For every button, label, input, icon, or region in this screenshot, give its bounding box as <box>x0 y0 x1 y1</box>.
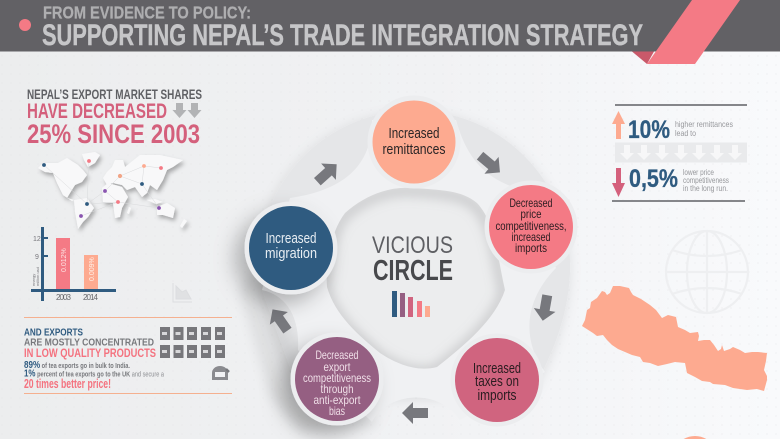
node: increased taxes on imports: Increased <box>473 360 521 377</box>
panel: low quality exports: ARE MOSTLY CONCENTRATED <box>24 336 154 348</box>
bar chart: 2014 <box>83 293 99 302</box>
ribbon <box>647 0 740 64</box>
cycle diagram <box>240 96 578 432</box>
centre label: CIRCLE <box>373 255 453 287</box>
centre label: VICIOUS <box>372 232 453 259</box>
export shares heading: NEPAL’S EXPORT MARKET SHARES <box>27 86 202 102</box>
export shares heading: 25% SINCE 2003 <box>27 119 200 149</box>
panel: remittance statistics: in the long run. <box>683 183 728 193</box>
white connecting band <box>262 120 556 422</box>
icon: shipping box <box>212 366 229 380</box>
panel: remittance statistics: lower price <box>683 167 714 177</box>
icon: up arrow <box>612 111 625 139</box>
node: decreased export competitiveness: export <box>324 360 351 374</box>
down arrow band <box>615 142 747 162</box>
node: decreased price competitiveness <box>484 180 578 274</box>
centre recess <box>326 188 505 372</box>
panel: low quality exports: 89% of tea exports go in bulk to India. <box>24 360 130 371</box>
node: decreased price competitiveness: Decreased <box>510 196 552 210</box>
node: decreased export competitiveness <box>290 332 384 426</box>
bar chart: 2003 <box>56 293 72 302</box>
icon: faint chart <box>173 283 192 302</box>
node: increased migration: migration <box>265 245 317 262</box>
node: decreased export competitiveness: anti-export <box>314 393 361 407</box>
panel: remittance statistics: 0,5% <box>629 165 678 193</box>
arrow: migration to remittances <box>310 156 344 190</box>
bar chart: 0.009% <box>89 257 96 281</box>
world map <box>38 152 187 229</box>
icon: globe <box>666 231 748 313</box>
map of Nepal <box>582 286 767 391</box>
node: decreased price competitiveness: increased <box>512 230 550 244</box>
node: decreased price competitiveness: competitiveness, <box>496 219 566 233</box>
header band <box>0 0 780 64</box>
bar chart: 0.012% <box>61 248 68 272</box>
node: increased taxes on imports: imports <box>478 387 516 404</box>
panel: remittance statistics: 10% <box>628 116 670 144</box>
bar chart: 9 <box>35 254 39 261</box>
header kicker: FROM EVIDENCE TO POLICY: <box>43 2 251 22</box>
panel: low quality exports: 1% percent of tea exports go to the UK and secure a <box>24 368 164 380</box>
outer grey ring <box>262 110 570 395</box>
bar chart: energy <box>31 274 36 286</box>
panel: remittance statistics <box>612 104 747 202</box>
node: increased remittances: remittances <box>382 141 446 158</box>
export shares heading: HAVE DECREASED <box>27 100 167 123</box>
arrow: remittances to price <box>473 147 507 181</box>
ribbon fold <box>632 52 654 64</box>
panel: low quality exports: AND EXPORTS <box>24 326 83 338</box>
panel: remittance statistics: competitiveness <box>683 175 729 185</box>
panel: low quality exports: IN LOW QUALITY PRODUCTS <box>24 346 156 360</box>
node: decreased price competitiveness: price <box>520 207 542 221</box>
panel: remittance statistics: higher remittances <box>675 119 733 129</box>
partial peach circle at lower edge <box>684 436 706 439</box>
icon: down arrow <box>612 168 625 197</box>
bar chart: million usd <box>35 267 40 286</box>
node: decreased export competitiveness: through <box>320 382 354 396</box>
node: decreased export competitiveness: Decreased <box>316 348 358 362</box>
shadow of the ring below <box>240 260 380 432</box>
panel: low quality exports <box>24 317 232 394</box>
node: increased taxes on imports <box>450 334 544 426</box>
arrow: taxes to export <box>402 402 428 424</box>
map location dots <box>42 159 163 218</box>
node: increased migration: Increased <box>266 230 316 247</box>
bar chart <box>31 227 116 302</box>
node: increased remittances: Increased <box>388 125 440 142</box>
node: decreased export competitiveness: bias <box>329 404 345 418</box>
icon: double down arrows <box>172 103 202 118</box>
arrow: price to taxes <box>532 293 558 323</box>
arrow: export to migration <box>264 303 296 337</box>
panel: remittance statistics: lead to <box>675 128 696 138</box>
node: increased remittances <box>368 96 460 188</box>
icon: tea bags <box>160 327 225 358</box>
bar chart: 12 <box>33 236 41 243</box>
centre label <box>372 232 453 317</box>
header bullet <box>19 19 31 31</box>
panel: low quality exports: 20 times better price! <box>24 377 111 391</box>
node: decreased export competitiveness: competitiveness <box>303 371 371 385</box>
node: increased taxes on imports: taxes on <box>475 373 519 390</box>
icon: descending bars <box>392 291 430 317</box>
node: decreased price competitiveness: imports <box>515 241 547 255</box>
node: increased migration <box>244 202 338 294</box>
export shares heading <box>27 86 202 149</box>
